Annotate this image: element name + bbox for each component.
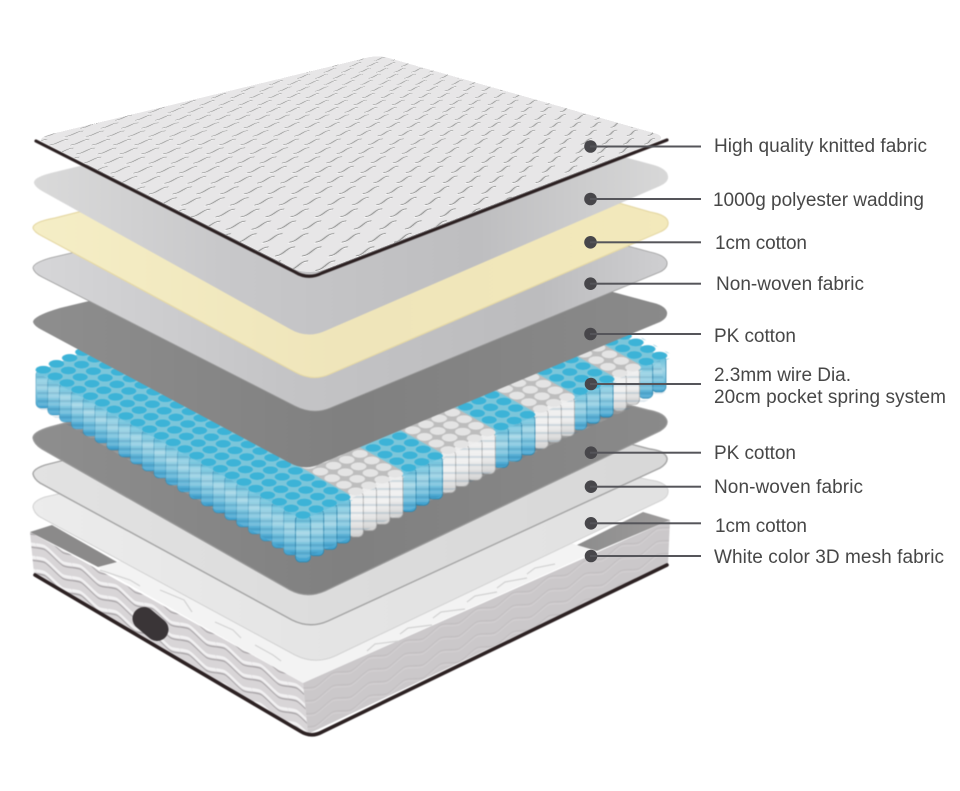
layer: upper PK cotton <box>33 230 667 467</box>
callout: high quality knitted fabric <box>584 136 927 157</box>
springs: top surface between caps, blue zones <box>43 303 659 515</box>
callout: non-woven fabric lower <box>585 477 863 498</box>
layer: lower non-woven fabric <box>33 380 667 625</box>
callout: non-woven fabric lower: Non-woven fabric <box>714 477 863 498</box>
callout: non-woven fabric <box>584 274 864 295</box>
callout: 1cm cotton <box>584 233 807 254</box>
callout: 1cm cotton: 1cm cotton <box>715 233 807 254</box>
callout: 1000g polyester wadding <box>584 190 924 211</box>
base mattress: white 3D mesh fabric border <box>30 490 670 735</box>
layer: 1000g polyester wadding <box>34 92 668 335</box>
callout: pocket spring system <box>585 365 946 408</box>
callout: white color 3D mesh fabric: White color 3D mesh fabric <box>714 547 944 568</box>
callout: pocket spring system: 2.3mm wire Dia. <box>714 365 851 386</box>
springs: right face columns, blue and white bands <box>296 356 666 562</box>
callout: PK cotton: PK cotton <box>714 326 796 347</box>
base: mesh top surface <box>98 490 597 683</box>
callout: PK cotton lower <box>585 443 796 464</box>
springs: blue caps <box>31 299 674 522</box>
springs: coil banding overlay <box>36 360 666 560</box>
callout: white color 3D mesh fabric <box>585 547 944 568</box>
callout: 1cm cotton lower: 1cm cotton <box>715 516 807 537</box>
springs: white caps <box>31 208 674 522</box>
layer: knitted fabric dark edge <box>36 140 667 276</box>
base: right side wave quilting <box>303 520 670 734</box>
callout: PK cotton <box>584 326 796 347</box>
layer: lower PK cotton <box>33 340 667 595</box>
pocket spring system <box>31 208 674 562</box>
layer: 1cm yellow cotton <box>33 135 668 378</box>
layer: lower 1cm cotton <box>33 420 668 660</box>
callout: PK cotton lower: PK cotton <box>714 443 796 464</box>
callout: high quality knitted fabric: High quality knitted fabric <box>714 136 927 157</box>
layer: high quality knitted fabric top panel <box>35 55 668 276</box>
base: left side wave quilting <box>30 532 308 734</box>
base: right grey strip <box>577 512 670 551</box>
layer: upper non-woven fabric <box>33 180 667 411</box>
badge: dark logo plate <box>128 602 173 646</box>
callout: non-woven fabric: Non-woven fabric <box>716 274 864 295</box>
springs: top surface between caps, white zones <box>43 210 659 515</box>
base: left grey strip <box>30 525 117 567</box>
base: mesh chevron stitching <box>100 564 555 661</box>
callout: 1cm cotton lower <box>585 516 807 537</box>
callout: pocket spring system: 20cm pocket spring system <box>714 387 946 408</box>
base: dark bottom edge <box>35 565 667 735</box>
callout: 1000g polyester wadding: 1000g polyester wadding <box>713 190 924 211</box>
springs: left face columns <box>36 370 299 555</box>
